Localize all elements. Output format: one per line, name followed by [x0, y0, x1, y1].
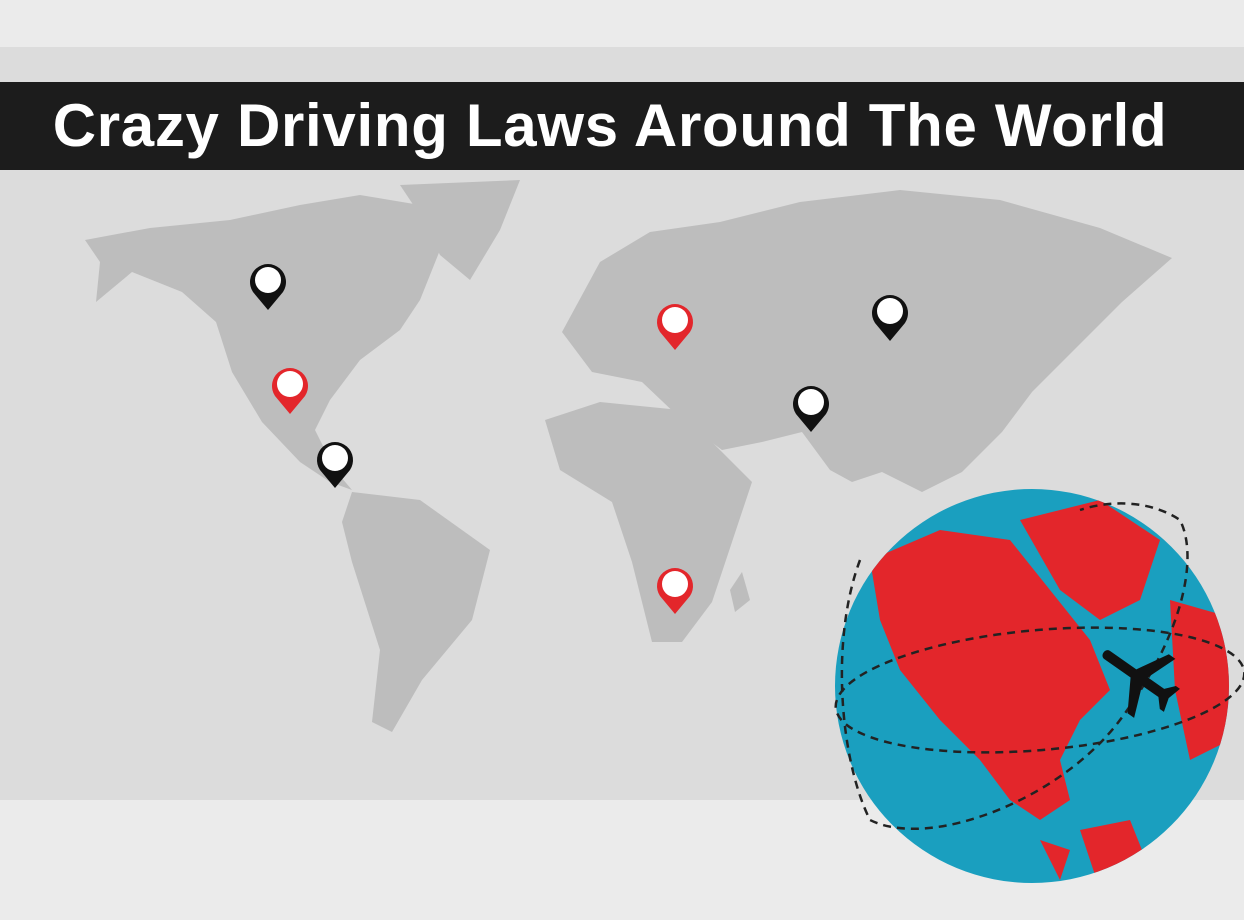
pin: usa — [272, 368, 308, 414]
continent: north america — [85, 195, 440, 490]
pin: south africa — [657, 568, 693, 614]
continent: africa — [545, 402, 752, 642]
continent: eurasia — [562, 190, 1172, 492]
title: Crazy Driving Laws Around The World — [53, 92, 1167, 159]
pin: asia — [872, 295, 908, 341]
continent: south america — [342, 492, 490, 732]
pin: central america — [317, 442, 353, 488]
title bar — [0, 82, 1244, 170]
continent: madagascar — [730, 572, 750, 612]
pin: europe — [657, 304, 693, 350]
pin: canada — [250, 264, 286, 310]
continent: greenland — [400, 180, 520, 280]
pin: india — [793, 386, 829, 432]
globe with plane — [834, 489, 1244, 883]
icon: plane — [1083, 623, 1193, 730]
